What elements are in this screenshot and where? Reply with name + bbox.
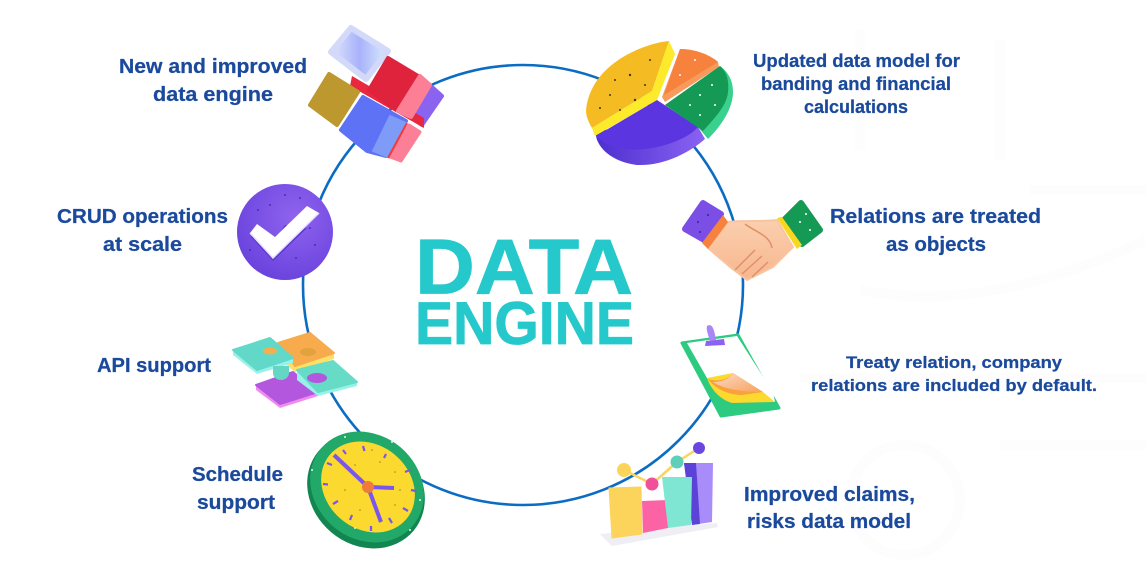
icon: handshake bbox=[685, 203, 820, 280]
label: treaty relation: Treaty relation, company bbox=[846, 353, 1063, 372]
icon: bar chart bbox=[600, 442, 718, 546]
label: improved claims: risks data model bbox=[747, 511, 911, 533]
label: CRUD operations: at scale bbox=[103, 234, 182, 256]
label: CRUD operations: CRUD operations bbox=[57, 206, 228, 228]
label: updated data model bbox=[753, 51, 960, 117]
label: relations as objects bbox=[830, 206, 1041, 256]
label: API support: API support bbox=[97, 355, 211, 377]
label: treaty relation: relations are included by default. bbox=[811, 376, 1097, 395]
icon: pie chart bbox=[586, 41, 733, 165]
label: schedule support: support bbox=[197, 492, 275, 514]
label: improved claims bbox=[744, 484, 915, 533]
title: ENGINE bbox=[415, 290, 634, 357]
title: DATA bbox=[415, 222, 633, 310]
title bbox=[415, 222, 634, 357]
label: treaty relation bbox=[811, 353, 1097, 395]
label: relations as objects: as objects bbox=[886, 234, 986, 256]
label: schedule support: Schedule bbox=[192, 464, 283, 486]
label: updated data model: Updated data model for bbox=[753, 51, 960, 71]
faint background decoration bbox=[800, 30, 1146, 555]
icon: check badge bbox=[237, 184, 333, 280]
label: new and improved data engine: data engine bbox=[153, 84, 273, 106]
label: updated data model: banding and financial bbox=[761, 74, 951, 94]
label: new and improved data engine bbox=[119, 56, 307, 106]
icon: puzzle bbox=[233, 333, 357, 408]
icon: cubes bbox=[310, 28, 442, 161]
ring connecting the items bbox=[303, 65, 743, 505]
label: updated data model: calculations bbox=[804, 97, 908, 117]
label: CRUD operations bbox=[57, 206, 228, 256]
label: improved claims: Improved claims, bbox=[744, 484, 915, 506]
icon: clock bbox=[284, 409, 448, 572]
label: schedule support bbox=[192, 464, 283, 514]
icon: clipboard bbox=[682, 325, 779, 416]
label: relations as objects: Relations are treated bbox=[830, 206, 1041, 228]
label: new and improved data engine: New and improved bbox=[119, 56, 307, 78]
